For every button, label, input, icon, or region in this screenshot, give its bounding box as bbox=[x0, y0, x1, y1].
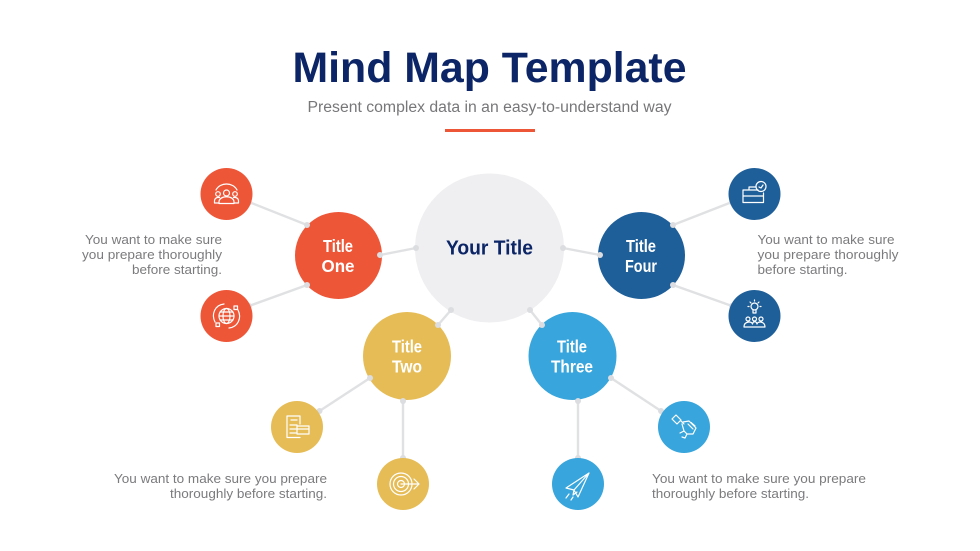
connector: center to title four bbox=[560, 245, 603, 258]
branch: title three bbox=[527, 307, 866, 510]
node: title two: Title bbox=[392, 336, 422, 356]
connector: center to title one bbox=[377, 245, 419, 258]
connector: title three to hand icon bbox=[608, 375, 664, 414]
connector: title four to idea icon bbox=[670, 282, 735, 309]
text block: title two bbox=[114, 471, 327, 501]
node: title one bbox=[295, 212, 382, 299]
text block: title two: thoroughly before starting. bbox=[170, 486, 327, 501]
branch: title one bbox=[82, 168, 419, 342]
node: title three bbox=[528, 312, 616, 400]
icon: hand with flag bbox=[658, 401, 710, 453]
icon: briefcase with clock bbox=[728, 168, 780, 220]
text block: title four: you prepare thoroughly bbox=[758, 247, 899, 262]
connector: title one to globe icon bbox=[246, 282, 310, 309]
branch: title two bbox=[114, 307, 454, 510]
node: title four bbox=[598, 212, 685, 299]
node: title two: Two bbox=[392, 356, 422, 376]
node: title four: Four bbox=[625, 256, 657, 276]
title underline bbox=[445, 129, 535, 132]
central node: Your Title bbox=[446, 238, 533, 260]
subtitle: Present complex data in an easy-to-understand way bbox=[308, 99, 672, 116]
icon: paper plane bbox=[552, 458, 604, 510]
node: title three: Title bbox=[557, 336, 587, 356]
text block: title one: you prepare thoroughly bbox=[82, 247, 223, 262]
icon: document and card bbox=[271, 401, 323, 453]
text block: title three: thoroughly before starting. bbox=[652, 486, 809, 501]
icon: people group bbox=[200, 168, 252, 220]
node: title one: Title bbox=[323, 236, 353, 256]
text block: title three bbox=[652, 471, 866, 501]
node: title two bbox=[363, 312, 451, 400]
connector: title two to target icon bbox=[400, 398, 406, 461]
connector: title one to people icon bbox=[246, 200, 310, 228]
text block: title four: before starting. bbox=[758, 262, 848, 277]
text block: title four bbox=[758, 232, 899, 277]
central node bbox=[415, 174, 564, 322]
text block: title three: You want to make sure you prepare bbox=[652, 471, 866, 486]
connector: center to title two bbox=[435, 307, 454, 328]
branch: title four bbox=[560, 168, 899, 342]
connector: title two to document icon bbox=[316, 375, 373, 414]
text block: title one: before starting. bbox=[132, 262, 222, 277]
text block: title four: You want to make sure bbox=[758, 232, 894, 247]
node: title three: Three bbox=[551, 356, 593, 376]
node: title one: One bbox=[322, 256, 355, 276]
node: title four: Title bbox=[626, 236, 656, 256]
text block: title two: You want to make sure you prepare bbox=[114, 471, 327, 486]
connector: title four to briefcase icon bbox=[670, 199, 735, 228]
connector: title three to plane icon bbox=[575, 398, 581, 461]
text block: title one bbox=[82, 232, 223, 277]
connector: center to title three bbox=[527, 307, 545, 328]
icon: globe with arrows bbox=[200, 290, 252, 342]
icon: target with arrow bbox=[377, 458, 429, 510]
icon: idea and people bbox=[728, 290, 780, 342]
text block: title one: You want to make sure bbox=[85, 232, 222, 247]
title: Mind Map Template bbox=[292, 44, 686, 92]
